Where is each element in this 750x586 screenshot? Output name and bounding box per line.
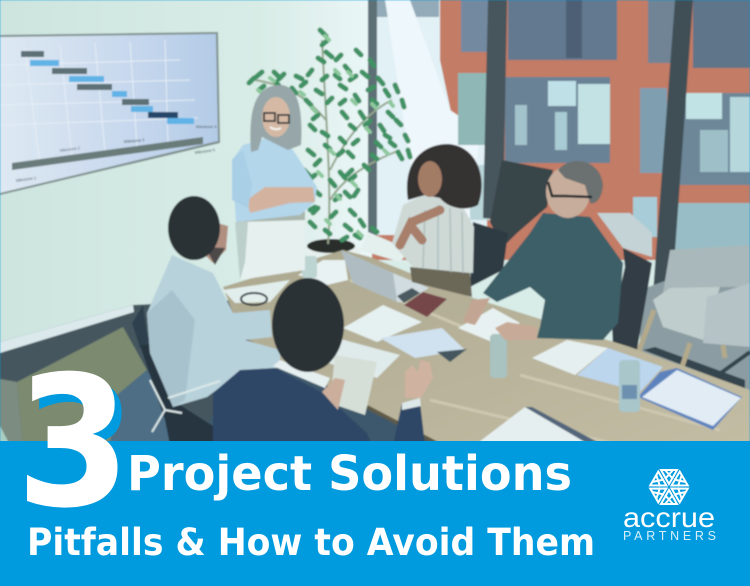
chair behind seated woman [470, 222, 508, 287]
wall-mounted screen with gantt chart: Milestone 2 [59, 145, 81, 153]
logo: Accrue Partners [623, 470, 716, 543]
plant [249, 30, 410, 268]
window and view of brick building [372, 0, 750, 260]
notebook [330, 355, 377, 415]
table papers and objects [223, 256, 742, 445]
back office chair [490, 160, 553, 247]
standing woman [232, 85, 317, 280]
chair behind seated man [612, 248, 652, 350]
subtitle: Pitfalls & How to Avoid Them: Pitfalls & How to Avoid Them [27, 521, 595, 564]
meeting table [223, 250, 750, 445]
wordmark line two: PARTNERS [623, 529, 716, 543]
wall-mounted screen with gantt chart: Milestone 4 [196, 124, 217, 129]
man in light shirt [147, 196, 280, 407]
wall [0, 0, 372, 360]
floor and heating grille [640, 250, 750, 400]
floor [0, 300, 440, 445]
number 3 with blue shadow: 3 [16, 337, 131, 548]
seated woman [392, 144, 482, 297]
left office chair [132, 305, 235, 445]
wall-mounted screen with gantt chart [0, 32, 220, 195]
seated man with glasses [463, 161, 623, 340]
wall-mounted screen with gantt chart: Milestone 5 [194, 147, 216, 155]
photo: meeting room scene [0, 0, 750, 445]
wordmark: accrue [623, 502, 715, 533]
title: Project Solutions: Project Solutions [127, 446, 572, 502]
wall-mounted screen with gantt chart: Milestone 1 [15, 175, 37, 183]
white chair [597, 213, 652, 257]
man in navy suit, seen from behind [213, 278, 433, 445]
window frames [360, 0, 693, 293]
wall-mounted screen with gantt chart: Milestone 3 [124, 137, 145, 144]
grey armchair [638, 245, 750, 375]
number 3 with blue shadow: 3 [23, 345, 138, 556]
banner: title background [0, 441, 750, 586]
laptop [341, 250, 429, 303]
icon: star mark [650, 470, 688, 504]
left chair legs [150, 380, 220, 432]
